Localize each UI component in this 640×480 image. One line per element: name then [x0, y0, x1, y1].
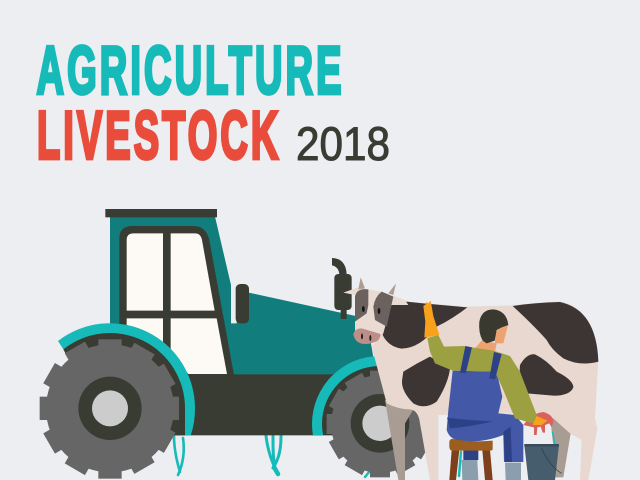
title: agriculture: AGRICULTURE: [36, 32, 345, 108]
cab and hood: [110, 217, 377, 377]
title: livestock: LIVESTOCK: [37, 97, 281, 173]
mirror: [236, 284, 249, 323]
overalls: [447, 371, 523, 462]
gloves: [423, 301, 547, 425]
far leg trouser: [463, 450, 478, 460]
window frame: [119, 226, 234, 375]
udder: [523, 412, 553, 435]
overall shading: [447, 418, 512, 462]
window panes: [127, 233, 227, 374]
cow and farmer: [343, 277, 598, 480]
roof: [105, 209, 217, 217]
cow head: [343, 277, 408, 344]
stool: [449, 439, 493, 480]
tractor: [40, 209, 380, 479]
milk stream: [552, 432, 555, 444]
bucket: [524, 444, 562, 480]
front wheel: [327, 371, 433, 477]
straps: [460, 346, 502, 379]
shirt: [427, 335, 537, 424]
far legs: [385, 400, 571, 480]
chassis: [167, 374, 380, 435]
boots: [462, 460, 521, 480]
exhaust pipe: [332, 258, 352, 319]
rear fender: [58, 323, 195, 435]
year: 2018: [296, 117, 390, 170]
face: [495, 325, 508, 343]
cow body: [372, 300, 598, 480]
front fender: [312, 356, 378, 435]
hair: [479, 309, 508, 343]
rear wheel: [40, 339, 179, 479]
cow spots: [383, 302, 598, 406]
neck: [475, 341, 497, 352]
grass: [174, 436, 461, 477]
